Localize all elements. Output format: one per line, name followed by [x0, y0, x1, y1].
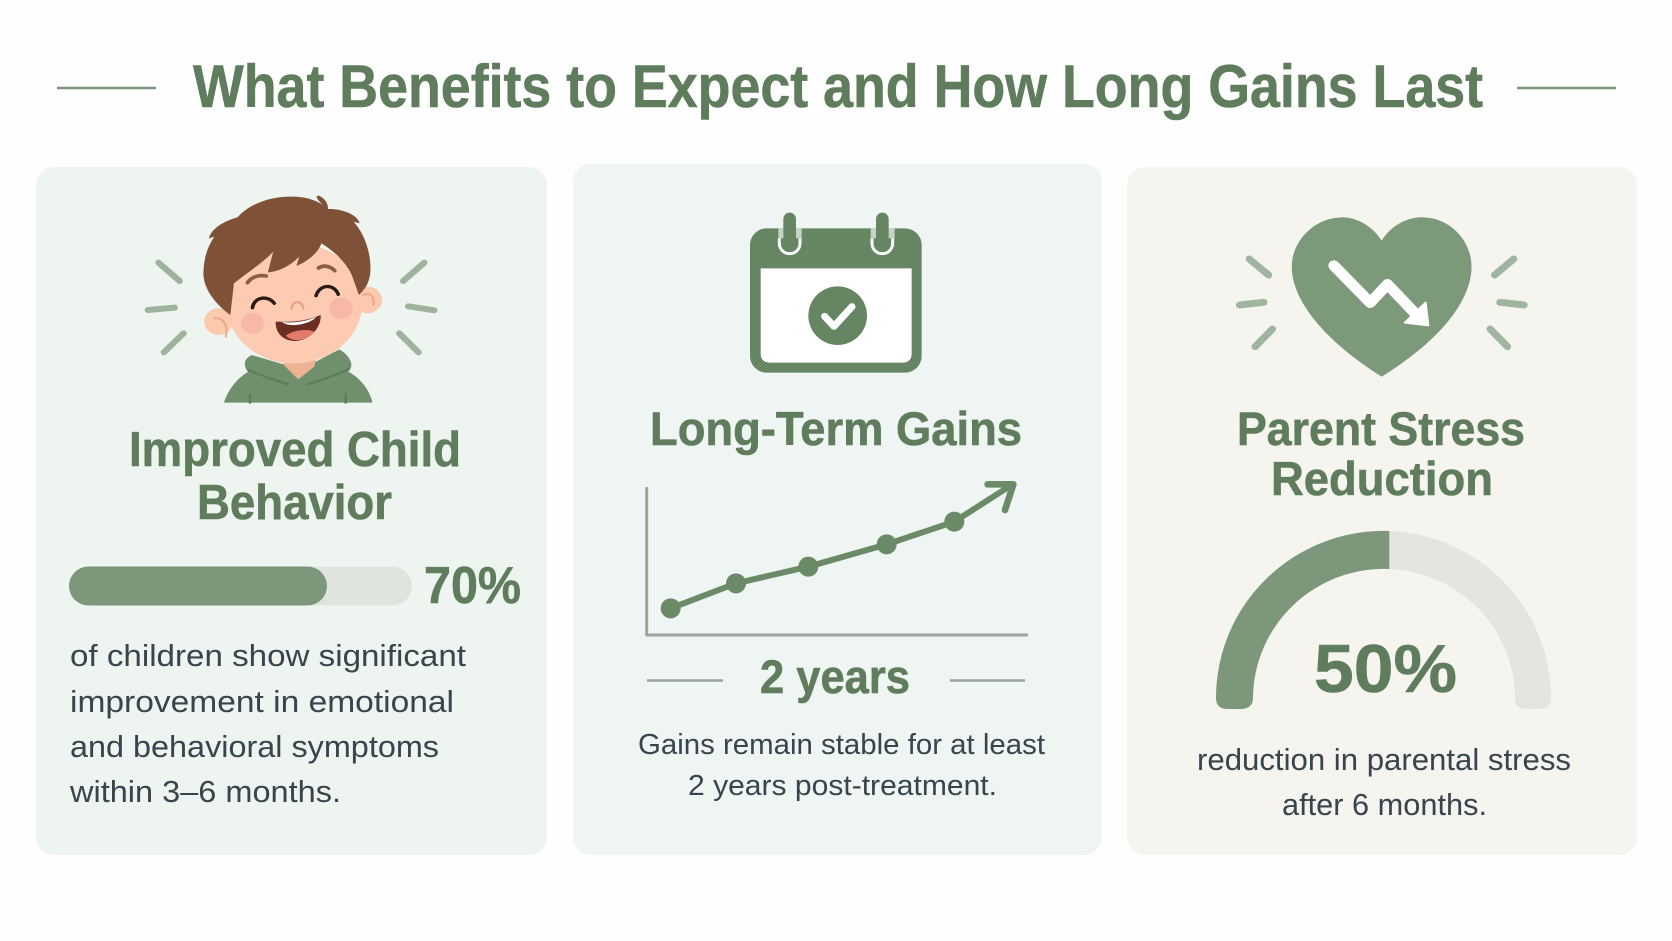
body text [69, 638, 466, 809]
heading [129, 423, 461, 530]
body text [638, 729, 1045, 802]
panel: parent stress reduction [1127, 167, 1637, 855]
icon: happy child [148, 196, 434, 403]
body text: within 3–6 months. [69, 774, 341, 809]
body text: reduction in parental stress [1197, 742, 1571, 777]
body text: 2 years post-treatment. [688, 770, 997, 802]
heading: Parent Stress [1237, 402, 1525, 455]
body text: after 6 months. [1282, 787, 1487, 822]
gauge [1216, 531, 1551, 709]
icon: heart with downward arrow [1240, 217, 1524, 377]
heading: Improved Child [129, 423, 461, 477]
body text: and behavioral symptoms [70, 729, 439, 764]
heading: Behavior [197, 476, 392, 530]
duration label: 2 years [760, 650, 910, 703]
stat: 50%: 50% [1314, 631, 1457, 707]
heading [1237, 402, 1525, 505]
line chart [647, 484, 1027, 635]
body text: Gains remain stable for at least [638, 729, 1045, 761]
title rule left [57, 87, 156, 89]
body text: improvement in emotional [70, 684, 454, 719]
stat: 70%: 70% [424, 557, 521, 615]
body text: of children show significant [70, 638, 466, 673]
heading: Long-Term Gains [650, 402, 1022, 455]
title: What Benefits to Expect and How Long Gains Last [193, 53, 1483, 120]
body text [1197, 742, 1571, 822]
panel: long-term gains [573, 164, 1102, 855]
progress bar [69, 566, 412, 606]
panel: improved child behavior [36, 167, 547, 855]
heading: Reduction [1271, 452, 1493, 505]
icon: calendar [750, 213, 922, 373]
title rule right [1517, 87, 1616, 89]
